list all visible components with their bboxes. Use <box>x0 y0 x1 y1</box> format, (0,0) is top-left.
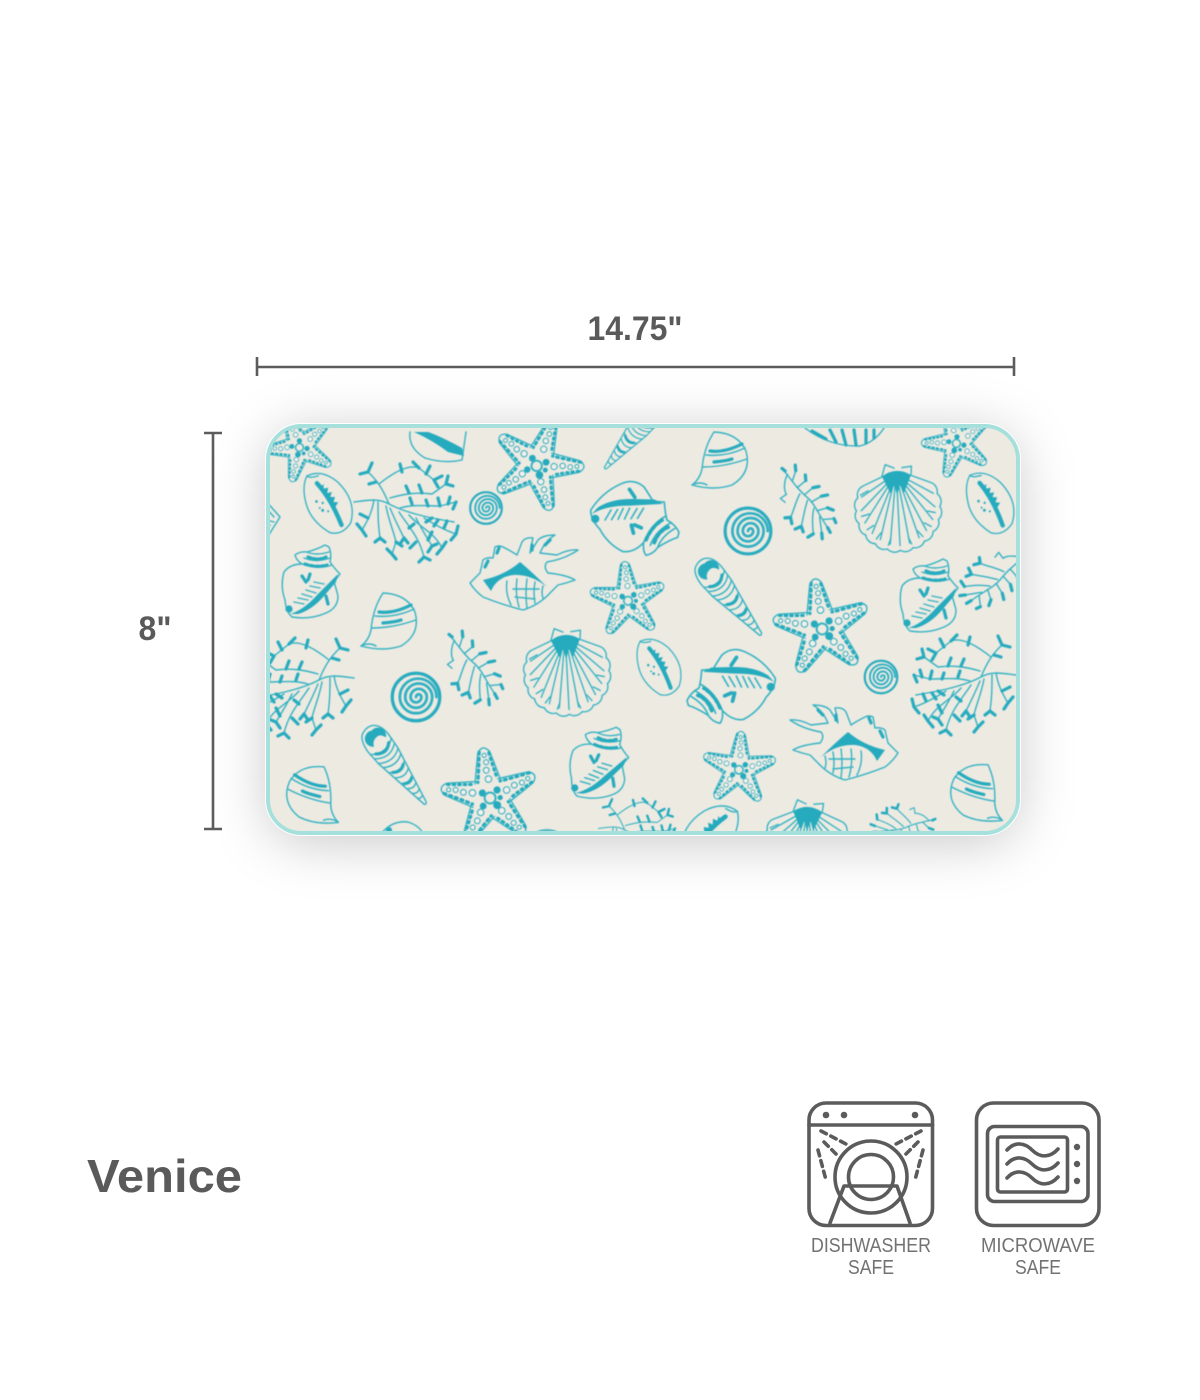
starfish <box>585 558 671 641</box>
starfish <box>440 746 536 831</box>
width label: 14.75" <box>588 310 682 348</box>
plate surface <box>270 428 1016 831</box>
width dimension <box>257 310 1014 376</box>
turret shell <box>694 556 764 637</box>
whelk <box>589 480 680 557</box>
icon: dishwasher <box>809 1103 932 1226</box>
whelk <box>567 724 631 801</box>
starfish <box>250 396 351 497</box>
clipped bottom spiral <box>535 829 559 839</box>
starfish <box>702 730 777 802</box>
plate with seashell pattern <box>265 423 1021 836</box>
small coral <box>868 802 938 831</box>
height dimension <box>138 433 222 829</box>
whelk <box>900 559 958 632</box>
starfish <box>496 428 586 512</box>
scallop <box>522 626 613 718</box>
plate shadow <box>268 432 1018 842</box>
label: dishwasher safe: DISHWASHER <box>811 1235 931 1257</box>
round shell <box>692 432 747 488</box>
spiral shell <box>865 661 897 693</box>
plate rim <box>266 424 1020 836</box>
icon: microwave safe <box>976 1103 1099 1279</box>
whelk <box>282 545 340 618</box>
icon: dishwasher safe <box>809 1103 932 1279</box>
whelk <box>686 648 777 725</box>
scallop <box>853 462 944 554</box>
spiny conch <box>470 535 578 610</box>
spiral shell <box>725 508 771 554</box>
round shell <box>361 593 416 649</box>
label: microwave safe: MICROWAVE <box>981 1235 1095 1257</box>
cowrie <box>302 472 354 535</box>
turret shell <box>603 428 656 470</box>
round shell <box>283 762 346 825</box>
clipped shell top <box>410 432 466 462</box>
clipped edge shell <box>265 500 280 541</box>
height label: 8" <box>138 610 172 648</box>
round shell <box>947 760 1010 823</box>
icon: microwave <box>976 1103 1099 1226</box>
small coral <box>958 551 1016 611</box>
seashell pattern <box>270 428 1016 831</box>
scallop <box>764 798 849 831</box>
small coral <box>446 628 506 708</box>
coral branch <box>598 796 677 831</box>
spiral shell <box>470 492 502 524</box>
spiny conch <box>790 705 898 780</box>
clipped scallop top <box>805 428 884 446</box>
width measure line <box>257 357 1014 376</box>
small coral <box>779 462 838 542</box>
spiral shell <box>392 673 440 721</box>
coral branch <box>354 462 458 562</box>
series name: Venice <box>87 1150 242 1202</box>
starfish <box>765 572 879 682</box>
cowrie <box>684 804 740 831</box>
icon: dishwasher safe: SAFE <box>848 1257 894 1279</box>
turret shell <box>360 724 428 806</box>
height measure line <box>204 433 222 829</box>
icon: microwave safe: SAFE <box>1015 1257 1061 1279</box>
cowrie <box>636 638 682 697</box>
coral branch <box>270 636 356 740</box>
coral branch <box>912 635 1016 735</box>
cowrie <box>964 472 1016 535</box>
starfish <box>908 392 1007 493</box>
clipped bottom shell <box>381 822 423 834</box>
